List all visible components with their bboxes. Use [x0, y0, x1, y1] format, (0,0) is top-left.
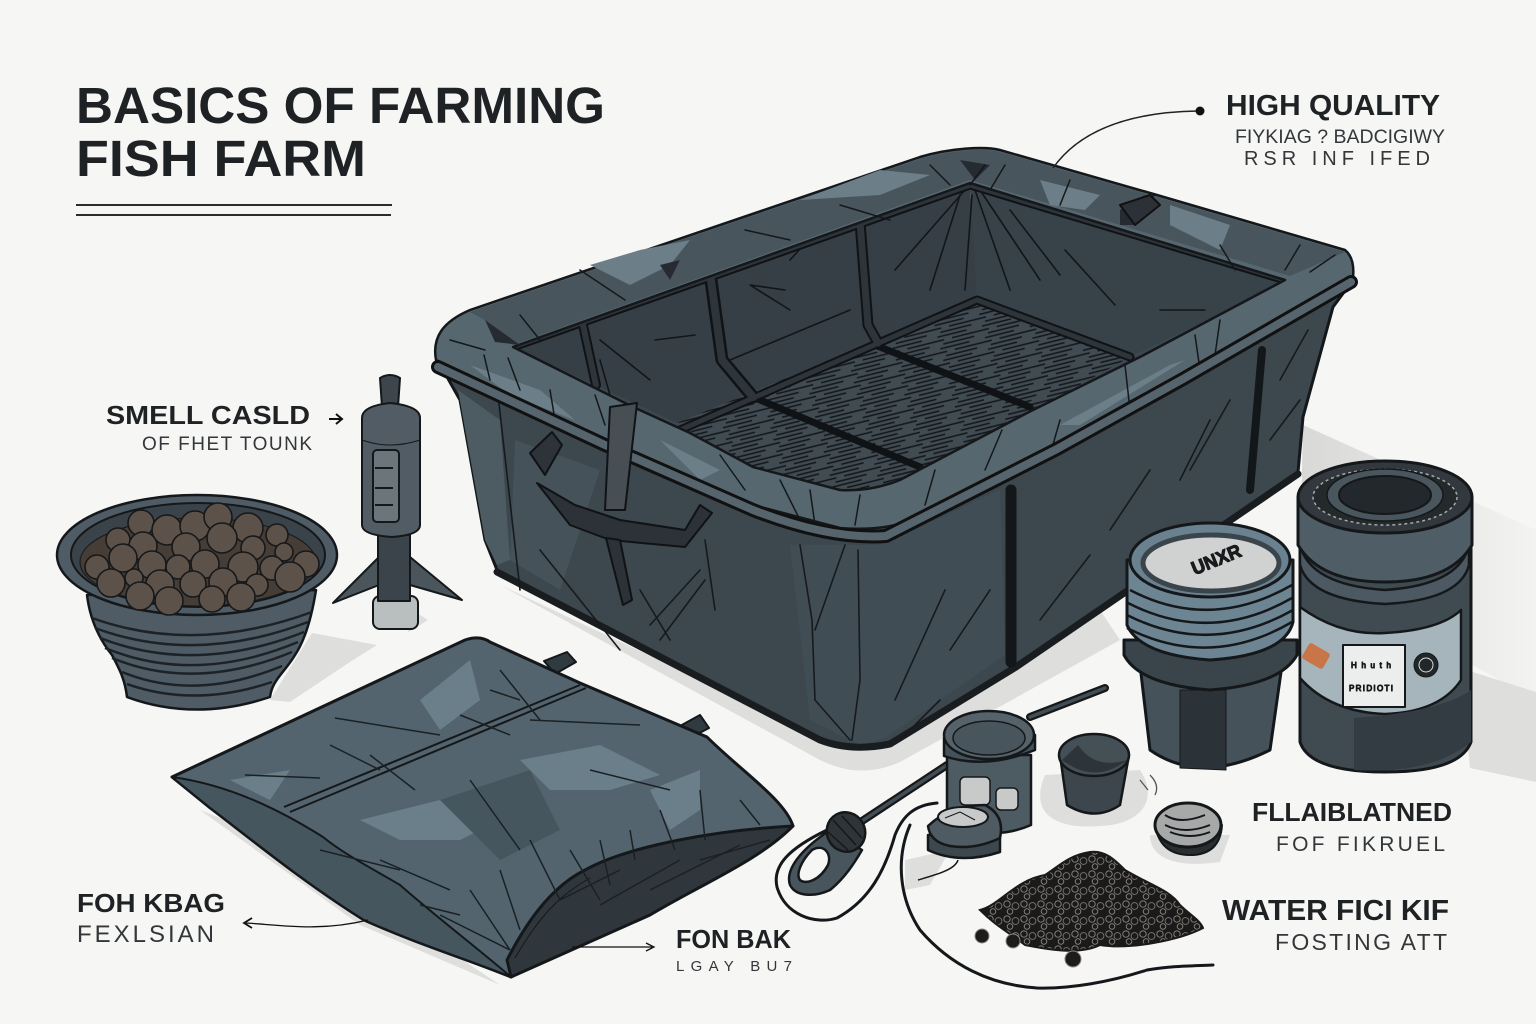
bag left flap: [172, 777, 511, 977]
label: water fici kif: FOSTING ATT: [1275, 929, 1447, 955]
interior straps fill: [513, 185, 1285, 430]
title: [76, 77, 605, 216]
side handle: [530, 403, 712, 605]
title: BASICS OF FARMING: [76, 77, 605, 134]
interior straps dark: [513, 185, 1285, 467]
canister lower dark block: [1354, 690, 1471, 771]
liner highlight blotches: [470, 170, 1230, 480]
jar lid label text: UNXR: [1189, 541, 1245, 580]
label: foh kbag: FEXLSIAN: [77, 921, 214, 948]
icon: small jar: [944, 711, 1035, 833]
interior right wall: [970, 183, 1290, 357]
fabric creases: [498, 330, 1308, 740]
canister collar: [1300, 545, 1469, 604]
icon: threaded jar: [1124, 523, 1297, 770]
label: fon bak: FON BAK: [676, 924, 791, 954]
canister round badge: [1414, 653, 1438, 677]
tank base band: [497, 474, 1298, 747]
interior floor: [677, 300, 1130, 495]
liner creases: [450, 165, 1335, 525]
canister white sticker: [1343, 645, 1405, 707]
icon: pump: [333, 375, 462, 629]
label: smell casld: OF FHET TOUNK: [142, 434, 312, 455]
bowl body: [87, 590, 316, 710]
hose: [776, 688, 1213, 988]
bag pocket opening: [507, 826, 793, 977]
label: smell casld: SMELL CASLD: [106, 400, 310, 430]
main fish tank basket: [435, 148, 1353, 747]
label: foh kbag: [77, 888, 368, 948]
label: flaiblatned: [1252, 797, 1452, 856]
icon: pellet pile: [975, 852, 1203, 967]
label: flaiblatned: FOF FIKRUEL: [1276, 833, 1445, 856]
canister orange badge: [1301, 642, 1331, 670]
icon: folded fish bag: [172, 638, 793, 977]
label: foh kbag: FOH KBAG: [77, 888, 225, 918]
bowl rim: [57, 495, 337, 615]
icon: gauge cap: [918, 805, 1001, 880]
canister lid: [1298, 497, 1472, 582]
label: fon bak: LGAY BU7: [676, 958, 792, 975]
liner back darker section: [470, 150, 1345, 345]
title: FISH FARM: [76, 130, 366, 187]
label: fon bak: [572, 924, 792, 975]
callout: high quality: RSR INF IFED: [1244, 148, 1430, 170]
hard rim band: [438, 282, 1351, 536]
interior left wall: [513, 183, 977, 423]
bag darker mid shade: [440, 770, 560, 860]
label: flaiblatned: FLLAIBLATNED: [1252, 797, 1452, 827]
ground shadows: [200, 425, 1536, 985]
callout: high quality: HIGH QUALITY: [1226, 90, 1440, 122]
canister label band: [1300, 607, 1461, 714]
liner rim fold: [435, 148, 1353, 529]
liner dark blotches: [485, 160, 1145, 345]
bag highlights: [230, 660, 700, 840]
icon: small dish of fibres: [1140, 775, 1222, 855]
under feed: [80, 518, 316, 606]
icon: cup: [1059, 734, 1129, 814]
tank body: [442, 200, 1353, 745]
label: smell casld: [106, 400, 342, 455]
callout: high quality: [1053, 90, 1445, 170]
interior folds: [600, 190, 1205, 395]
icon: feed bowl: [57, 495, 337, 710]
icon: large canister: Hhuth: [1351, 661, 1391, 670]
icon: rope knot loop: [789, 805, 872, 895]
vertical straps: [1006, 490, 1016, 662]
icon: large canister: [1298, 461, 1472, 772]
bag creases: [245, 670, 770, 950]
bag tabs: [544, 652, 709, 738]
label: water fici kif: WATER FICI KIF: [1222, 895, 1449, 927]
feed balls: [85, 503, 319, 615]
bag body: [172, 638, 793, 977]
bag seam: [284, 685, 586, 812]
icon: large canister: PRIDIOTI: [1349, 684, 1393, 693]
tank left highlight: [458, 390, 510, 565]
callout: high quality: FIYKIAG ? BADCIGIWY: [1235, 127, 1445, 148]
buckle at back rim: [1120, 195, 1160, 225]
label: water fici kif: [1222, 895, 1449, 955]
